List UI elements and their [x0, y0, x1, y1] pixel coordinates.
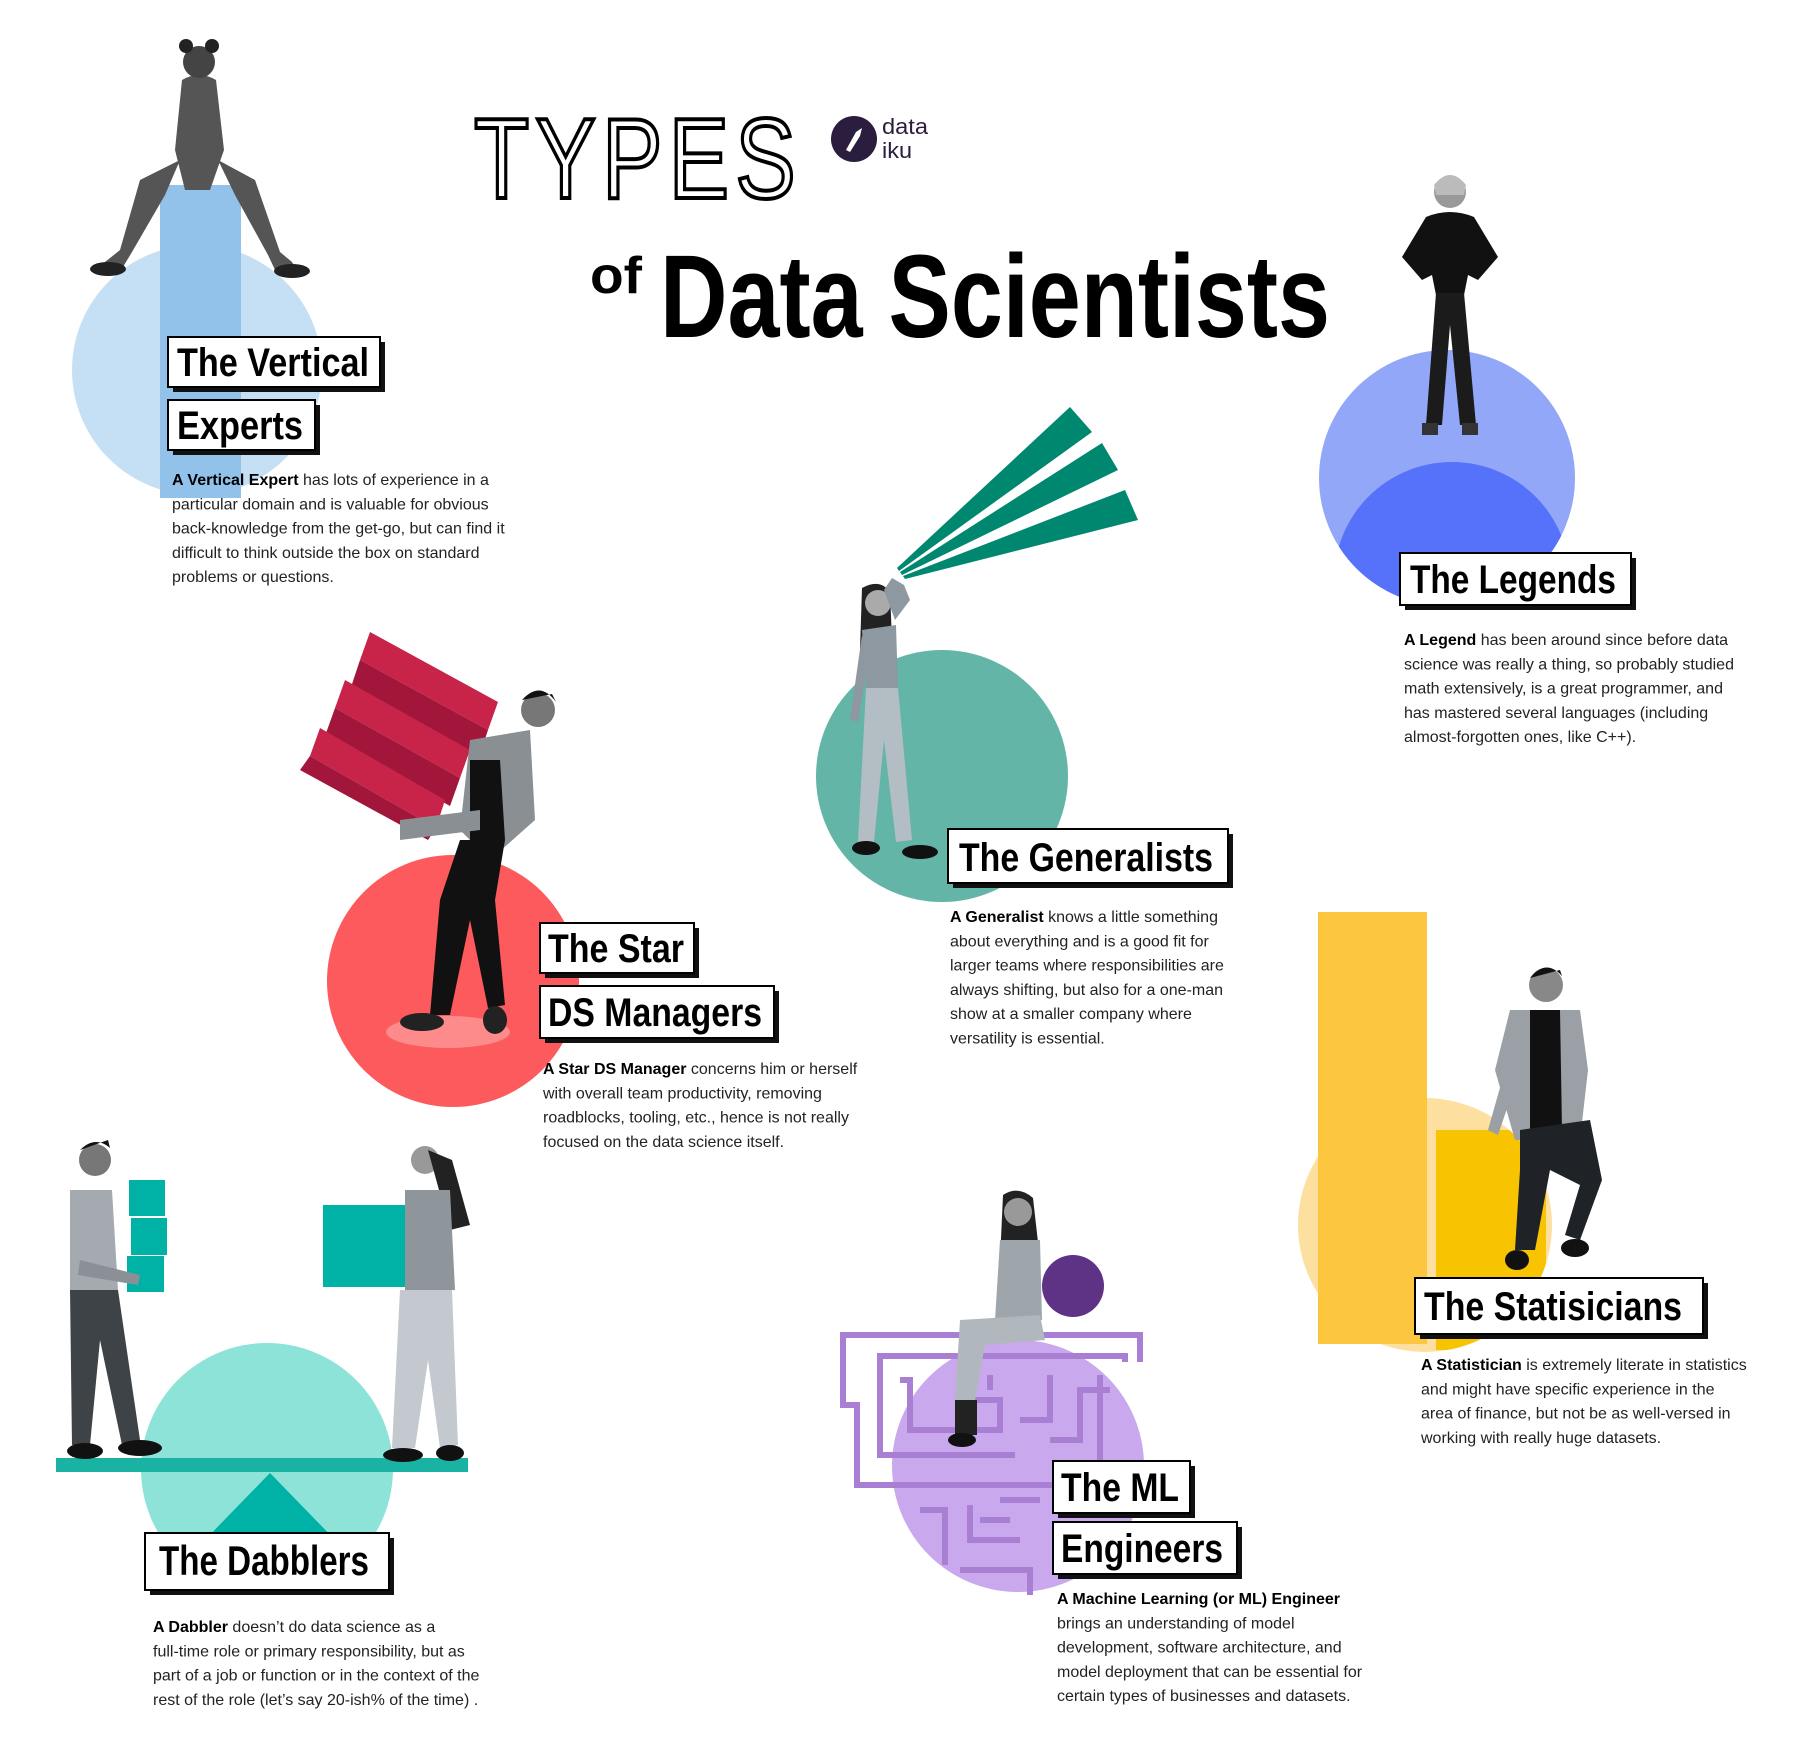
text: dabbler description: A Dabbler doesn’t do data science as a	[153, 1619, 435, 1636]
label: The Legends: The Legends	[1410, 558, 1616, 602]
shape: red circle	[327, 855, 579, 1107]
shape: blue bar	[160, 185, 241, 498]
text: star ds manager description: focused on the data science itself.	[543, 1134, 784, 1151]
text: ml engineer description: model deployment that can be essential for	[1057, 1664, 1363, 1681]
text: statistician description: and might have specific experience in the	[1421, 1381, 1715, 1398]
person: woman holding box	[383, 1146, 470, 1462]
label: DS Managers: DS Managers	[548, 991, 762, 1035]
text: generalist description: A Generalist knows a little something	[950, 909, 1218, 926]
text: ml engineer description: A Machine Learning (or ML) Engineer	[1057, 1591, 1340, 1608]
icon: small stacked boxes	[127, 1180, 167, 1292]
person: sitting woman	[90, 39, 310, 278]
person: man carrying slabs	[400, 690, 556, 1034]
text: vertical expert description: difficult to think outside the box on standard	[172, 545, 479, 562]
panel: ml engineers	[843, 1191, 1367, 1705]
icon: maze	[843, 1335, 1140, 1595]
label: The Dabblers	[145, 1533, 394, 1595]
text: dabbler description: full-time role or primary responsibility, but as	[153, 1643, 465, 1660]
panel: dabblers	[56, 1140, 484, 1709]
shape: light teal circle	[141, 1343, 393, 1595]
text: star ds manager description: roadblocks, tooling, etc., hence is not really	[543, 1110, 849, 1127]
title	[474, 96, 1330, 363]
shape: dark purple circle	[1042, 1255, 1104, 1317]
panel: statisticians	[1298, 912, 1751, 1447]
text: generalist description: show at a smaller company where	[950, 1006, 1192, 1023]
label: The Generalists	[948, 829, 1233, 888]
text: dabbler description: rest of the role (let’s say 20-ish% of the time) .	[153, 1692, 478, 1709]
text: vertical expert description: A Vertical Expert has lots of experience in a	[172, 472, 489, 489]
icon: green beams	[897, 407, 1138, 579]
text: dabbler description: part of a job or function or in the context of the	[153, 1668, 480, 1685]
label: DS Managers	[540, 986, 779, 1043]
logo: dataiku: data	[882, 114, 929, 139]
logo: dataiku: iku	[882, 138, 912, 163]
icon: big box	[323, 1205, 405, 1287]
label: The Dabblers: The Dabblers	[159, 1537, 369, 1584]
text: statistician description: A Statistician is extremely literate in statistics	[1421, 1357, 1747, 1374]
text: generalist description: always shifting, but also for a one-man	[950, 982, 1223, 999]
label: The Star: The Star	[548, 927, 684, 971]
label: The Statisicians	[1415, 1278, 1708, 1339]
text: legend description: almost-forgotten ones, like C++).	[1404, 729, 1636, 746]
shape: light yellow circle	[1298, 1098, 1552, 1352]
label: Experts: Experts	[177, 404, 303, 448]
text: legend description: has mastered several languages (including	[1404, 705, 1708, 722]
text: legend description: A Legend has been around since before data	[1404, 632, 1728, 649]
person: standing woman	[1402, 175, 1498, 435]
text: generalist description: about everything and is a good fit for	[950, 933, 1210, 950]
text: statistician description: area of finance, but not be as well-versed in	[1421, 1406, 1731, 1423]
panel: vertical experts	[72, 39, 509, 586]
shape: dark teal triangle	[200, 1473, 340, 1545]
shape: seesaw bar	[56, 1458, 468, 1472]
panel: star ds managers	[300, 632, 862, 1151]
logo: dataiku	[831, 114, 929, 163]
shape: light blue circle	[72, 245, 322, 495]
text: legend description: science was really a thing, so probably studied	[1404, 656, 1734, 673]
label: The Statisicians: The Statisicians	[1424, 1285, 1682, 1329]
label: The Legends	[1400, 553, 1636, 610]
label: The ML: The ML	[1061, 1466, 1179, 1510]
title: of Data Scientists: of	[590, 247, 643, 305]
icon: crimson slabs	[300, 632, 498, 840]
text: star ds manager description: with overall team productivity, removing	[542, 1085, 822, 1102]
person: sitting woman	[948, 1191, 1045, 1447]
person: woman looking ahead	[850, 578, 938, 859]
text: ml engineer description: brings an understanding of model	[1057, 1615, 1294, 1632]
text: star ds manager description: A Star DS Manager concerns him or herself	[543, 1061, 857, 1078]
label: The Vertical: The Vertical	[177, 341, 369, 385]
text: legend description: math extensively, is a great programmer, and	[1404, 681, 1723, 698]
text: vertical expert description: back-knowledge from the get-go, but can find it	[172, 521, 505, 538]
text: ml engineer description: certain types of businesses and datasets.	[1057, 1688, 1351, 1705]
label: The Generalists: The Generalists	[959, 836, 1213, 880]
shape: legend circles	[1319, 350, 1575, 597]
panel: generalists	[816, 407, 1233, 1048]
person: man holding boxes	[67, 1140, 162, 1459]
person: sitting man	[1488, 967, 1602, 1270]
text: vertical expert description: particular domain and is valuable for obvious	[172, 496, 489, 513]
shape: lavender circle	[892, 1340, 1144, 1592]
shape: yellow bar	[1318, 912, 1427, 1344]
panel: legends	[1319, 175, 1738, 746]
title: TYPES: TYPES	[474, 96, 802, 223]
text: generalist description: larger teams where responsibilities are	[950, 958, 1224, 975]
text: vertical expert description: problems or questions.	[172, 569, 334, 586]
label: Engineers: Engineers	[1061, 1527, 1223, 1571]
title: of Data Scientists: Data Scientists	[660, 231, 1330, 363]
text: ml engineer description: development, software architecture, and	[1057, 1640, 1342, 1657]
text: generalist description: versatility is essential.	[950, 1030, 1105, 1048]
text: statistician description: working with really huge datasets.	[1420, 1430, 1661, 1447]
shape: teal circle	[816, 650, 1068, 902]
